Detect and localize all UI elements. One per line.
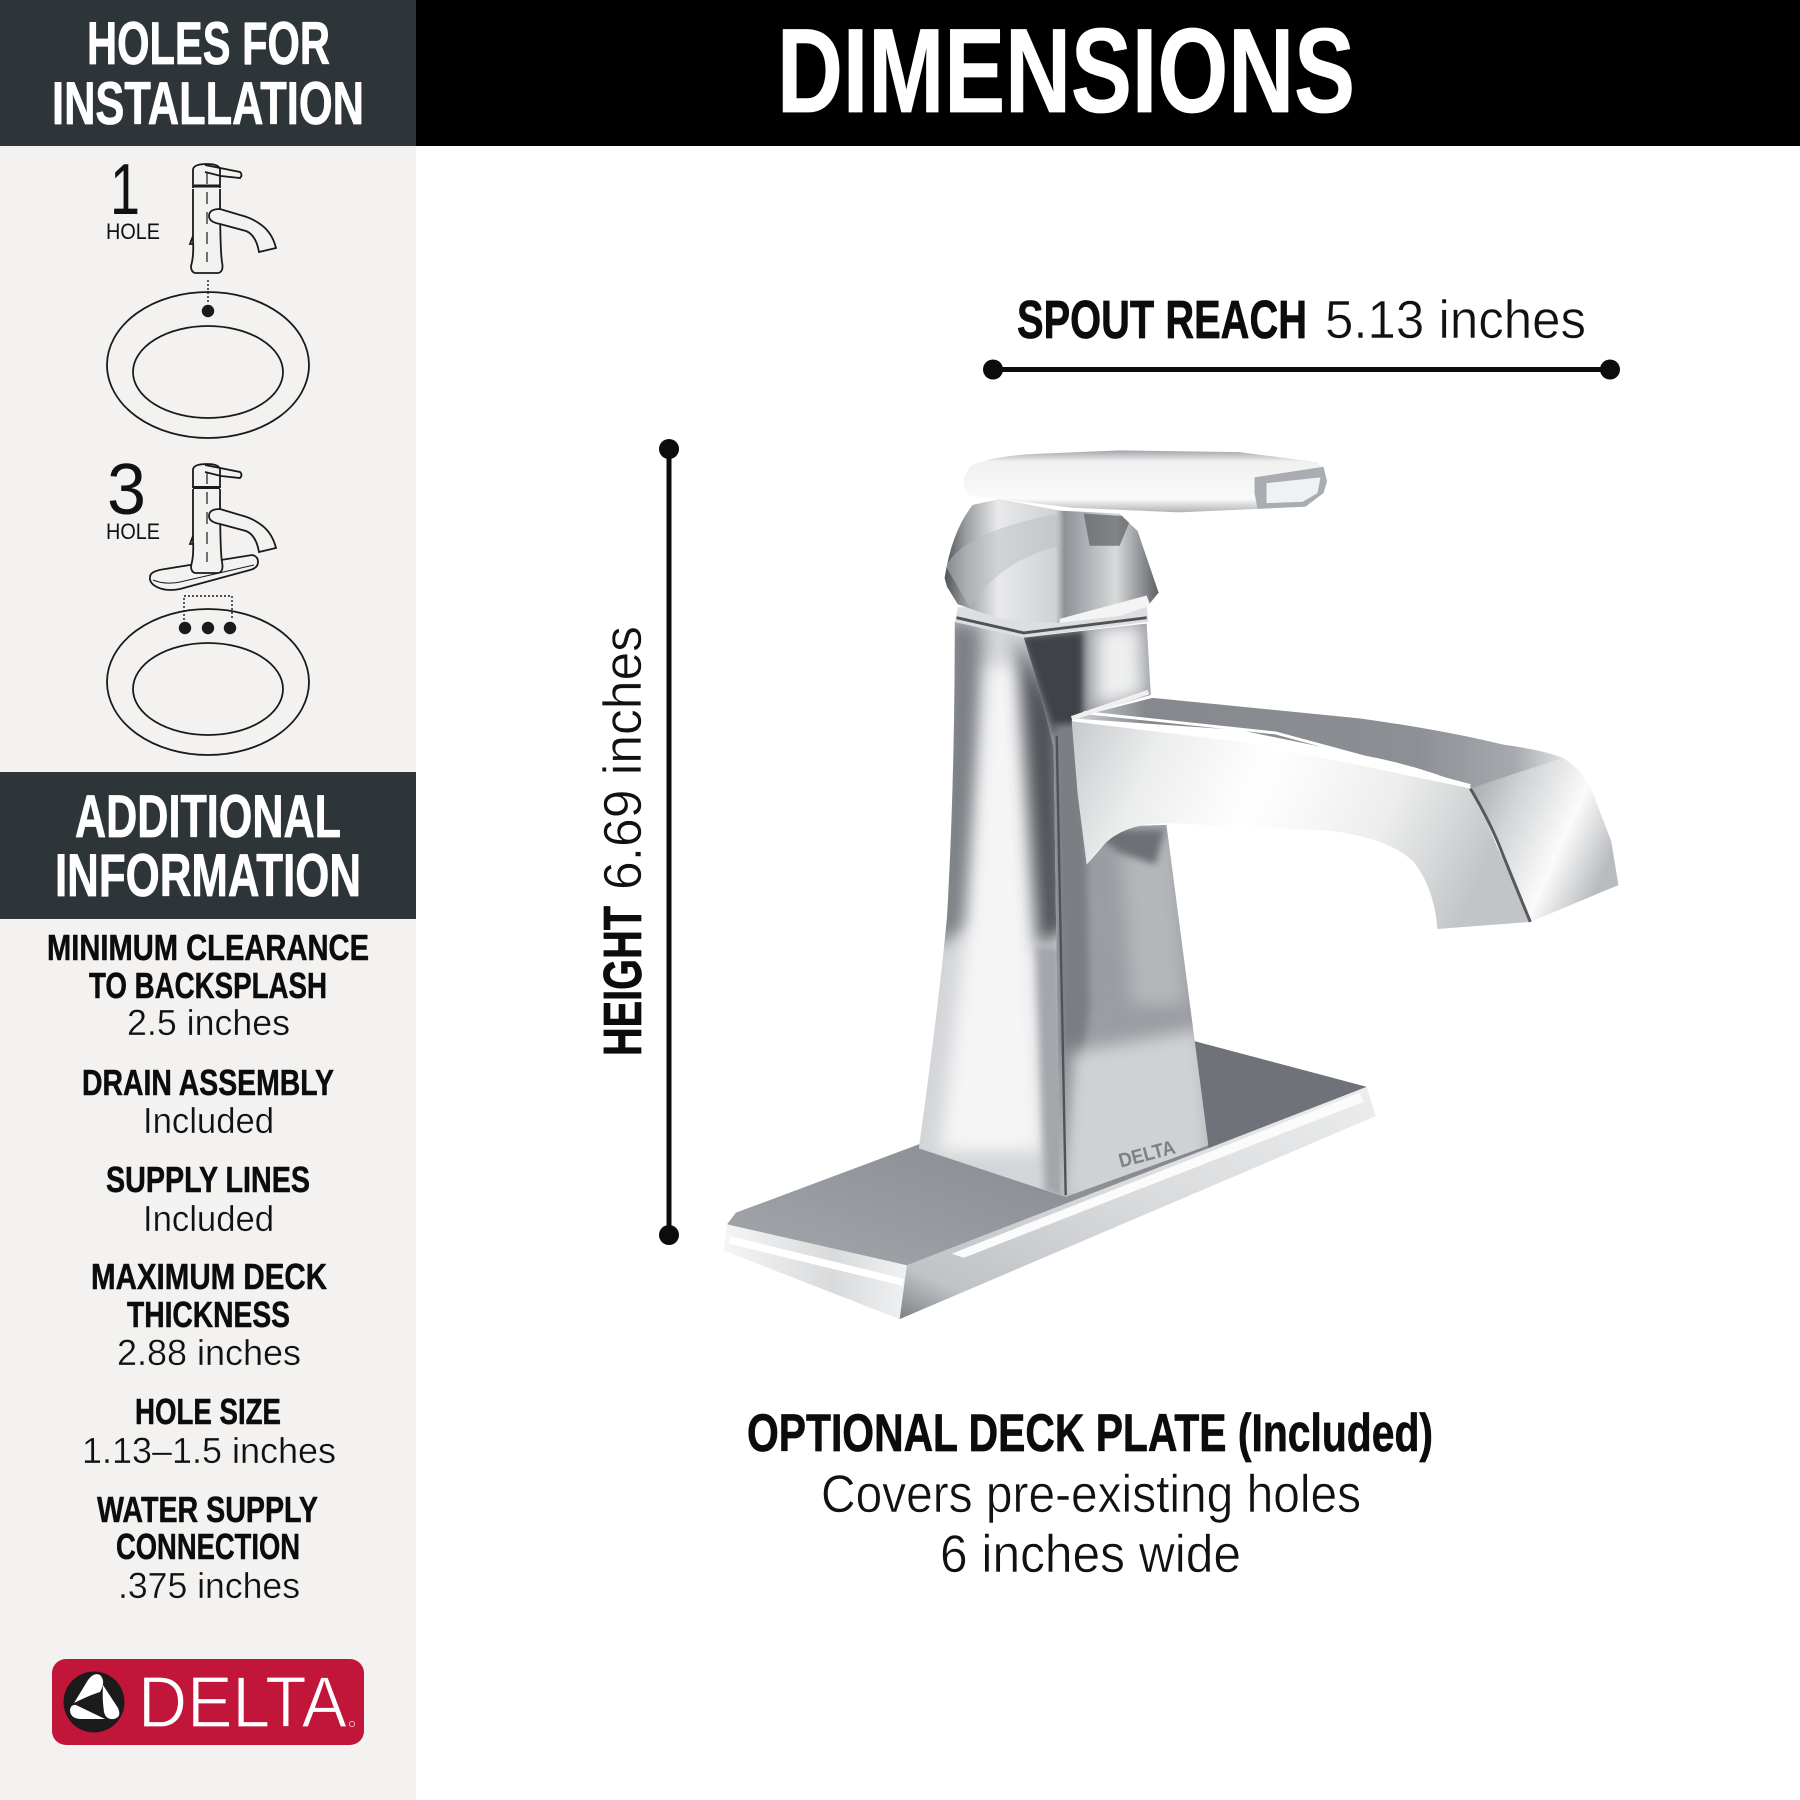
dimension: height: 6.69 inches (593, 626, 653, 890)
spec: drain assembly: DRAIN ASSEMBLY (82, 1062, 334, 1103)
callout: optional deck plate: OPTIONAL DECK PLATE (Included) (747, 1404, 1433, 1463)
spec: supply lines: SUPPLY LINES (106, 1159, 310, 1200)
icon: three hole installation: 3 (107, 450, 146, 530)
spec: hole size: HOLE SIZE (135, 1391, 281, 1432)
spec: minimum clearance: 2.5 inches (127, 1002, 290, 1043)
deck plate (724, 1041, 1376, 1319)
heading: additional information: ADDITIONAL (75, 783, 341, 850)
heading: additional information: INFORMATION (55, 842, 361, 909)
heading: holes for installation (0, 0, 416, 146)
heading: additional information (0, 772, 416, 919)
icon: three hole installation: HOLE (106, 519, 160, 544)
spec: water supply connection (97, 1489, 318, 1606)
top banner: dimensions (416, 0, 1800, 146)
icon: one hole installation (106, 150, 309, 438)
heading: holes for installation: INSTALLATION (52, 70, 364, 137)
spec: maximum deck thickness: THICKNESS (127, 1294, 290, 1335)
faucet image (724, 450, 1618, 1319)
dimension: spout reach: 5.13 inches (1325, 290, 1586, 350)
title: DIMENSIONS (777, 4, 1355, 138)
spec: water supply connection: CONNECTION (116, 1526, 300, 1567)
icon: three hole installation (106, 450, 309, 755)
spec: supply lines (106, 1159, 310, 1239)
icon: one hole installation: 1 (110, 150, 140, 230)
spec: minimum clearance: MINIMUM CLEARANCE (47, 927, 369, 968)
cap (945, 499, 1159, 638)
logo: delta: DELTA (138, 1663, 347, 1743)
spec: minimum clearance: TO BACKSPLASH (89, 965, 327, 1006)
faucet body (919, 622, 1208, 1197)
icon: one hole installation: HOLE (106, 219, 160, 244)
spec: hole size (82, 1391, 336, 1471)
dimension: height (593, 439, 679, 1245)
sidebar background (0, 0, 416, 1800)
spec: maximum deck thickness: MAXIMUM DECK (91, 1256, 327, 1297)
dimension: spout reach: SPOUT REACH (1017, 290, 1307, 350)
callout: optional deck plate: Covers pre-existing holes (821, 1465, 1361, 1524)
spec: supply lines: Included (143, 1198, 274, 1239)
dimension: spout reach (983, 290, 1620, 380)
handle (964, 450, 1327, 512)
spec: maximum deck thickness: 2.88 inches (117, 1332, 301, 1373)
callout: optional deck plate: 6 inches wide (940, 1525, 1241, 1584)
spec: drain assembly: Included (143, 1100, 274, 1141)
spec: water supply connection: WATER SUPPLY (97, 1489, 318, 1530)
logo: delta (52, 1659, 364, 1745)
heading: holes for installation: HOLES FOR (87, 10, 330, 77)
spout (1072, 692, 1618, 929)
spec: maximum deck thickness (91, 1256, 327, 1373)
spec: minimum clearance (47, 927, 369, 1043)
spec: drain assembly (82, 1062, 334, 1141)
spec: hole size: 1.13–1.5 inches (82, 1430, 336, 1471)
spec: water supply connection: .375 inches (118, 1565, 300, 1606)
faucet brand mark: DELTA (1116, 1137, 1178, 1172)
callout: optional deck plate (747, 1404, 1433, 1584)
dimension: height: HEIGHT (593, 906, 653, 1056)
